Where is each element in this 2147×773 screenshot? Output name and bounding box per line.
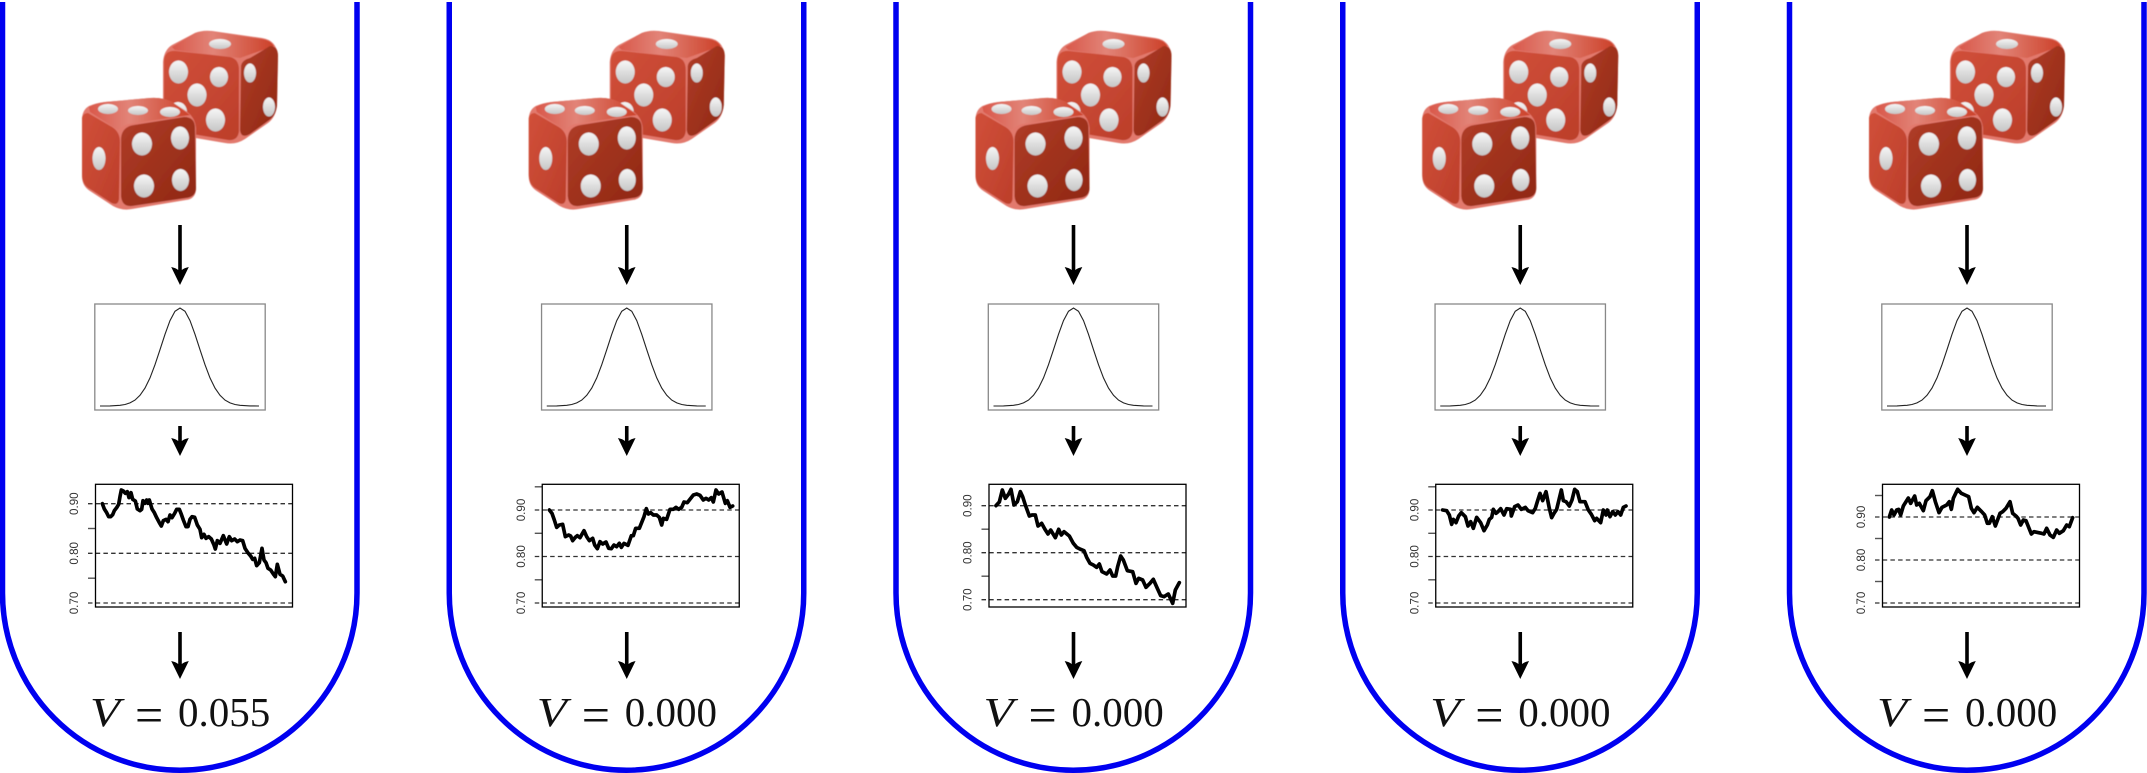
value label: 0.000 [625, 689, 717, 735]
chart: price path [68, 484, 292, 614]
value label: V [984, 689, 1018, 735]
arrow: path to value [618, 632, 636, 679]
arrow: dice to distribution [1958, 225, 1976, 285]
icon: dice [529, 31, 725, 210]
chart: price path [1408, 484, 1633, 614]
chart: price path [962, 484, 1186, 611]
chart: price path: 0.70 [1855, 592, 1868, 614]
value label: 0.000 [1072, 689, 1164, 735]
chart: price path: 0.90 [962, 494, 974, 517]
value label: = [1922, 687, 1950, 743]
chart: price path [515, 484, 739, 614]
panel: run 2 [449, 2, 804, 770]
value label: = [135, 687, 163, 743]
chart: price path: 0.70 [1408, 592, 1421, 614]
chart: bell curve [1435, 304, 1605, 410]
arrow: path to value [1065, 632, 1082, 679]
arrow: dice to distribution [1511, 225, 1529, 285]
blue U-shaped container [896, 2, 1250, 770]
chart: price path: 0.80 [1855, 549, 1868, 571]
chart: price path: 0.90 [1855, 506, 1868, 528]
panel: run 5 [1790, 2, 2144, 770]
arrow: dice to distribution [171, 225, 189, 285]
arrow: path to value [171, 632, 189, 679]
chart: price path: 0.80 [68, 542, 81, 565]
value label: 0.000 [1965, 689, 2057, 735]
value label: = [582, 687, 610, 743]
value label: V [1877, 689, 1912, 735]
blue U-shaped container [1343, 2, 1697, 770]
arrow: dice to distribution [618, 225, 636, 285]
value label: = [1028, 687, 1057, 743]
panel: run 3 [896, 2, 1250, 770]
chart: price path [1855, 484, 2080, 614]
panel: run 1 [2, 2, 357, 770]
chart: bell curve [542, 304, 712, 410]
chart: price path: 0.80 [515, 545, 528, 568]
chart: bell curve [1882, 304, 2052, 410]
arrow: distribution to path [1511, 426, 1529, 456]
panel: run 4 [1343, 2, 1697, 770]
arrow: distribution to path [1958, 426, 1976, 456]
chart: price path: 0.70 [962, 588, 974, 611]
chart: price path: 0.90 [68, 492, 81, 515]
value label: V [90, 689, 125, 735]
arrow: distribution to path [1065, 426, 1082, 456]
icon: dice [1869, 31, 2065, 210]
icon: dice [1422, 31, 1618, 210]
arrow: distribution to path [618, 426, 636, 456]
chart: bell curve [95, 304, 265, 410]
icon: dice [976, 31, 1172, 210]
value label: 0.000 [1518, 689, 1610, 735]
chart: price path: 0.70 [68, 592, 81, 614]
arrow: distribution to path [171, 426, 189, 456]
chart: price path: 0.90 [515, 499, 528, 521]
value label: = [1475, 687, 1503, 743]
arrow: dice to distribution [1065, 225, 1082, 285]
value label: V [1430, 689, 1465, 735]
chart: bell curve [988, 304, 1159, 410]
blue U-shaped container [1790, 2, 2144, 770]
blue U-shaped container [2, 2, 357, 770]
arrow: path to value [1511, 632, 1529, 679]
chart: price path: 0.70 [515, 592, 528, 614]
chart: price path: 0.90 [1408, 499, 1421, 521]
value label: V [537, 689, 571, 735]
blue U-shaped container [449, 2, 804, 770]
value label: 0.055 [178, 689, 270, 735]
icon: dice [82, 31, 278, 210]
arrow: path to value [1958, 632, 1976, 679]
chart: price path: 0.80 [1408, 545, 1421, 568]
chart: price path: 0.80 [962, 541, 974, 564]
